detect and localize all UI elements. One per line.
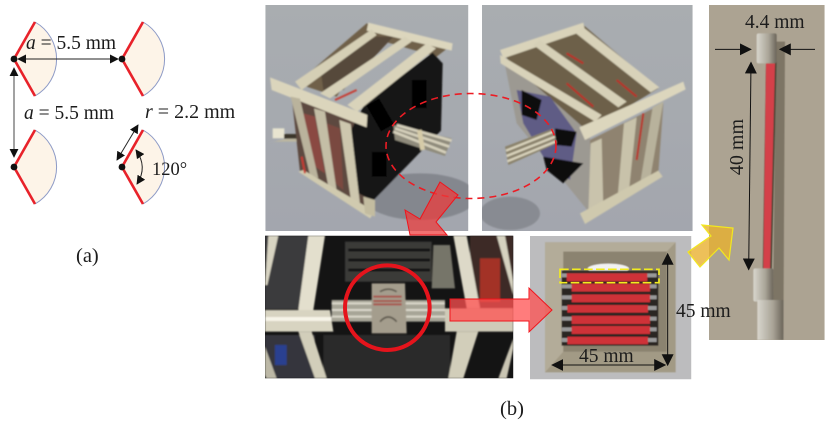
length dimension arrow xyxy=(749,63,751,269)
label vertical spacing: a = 5.5 mm xyxy=(24,103,114,124)
callout circle xyxy=(345,265,430,350)
label angle: 120° xyxy=(152,160,187,180)
photo: assembly right view xyxy=(480,5,693,231)
sector top left xyxy=(11,22,57,96)
label horizontal spacing: a = 5.5 mm xyxy=(26,33,116,54)
sector bottom right xyxy=(119,130,165,204)
caption a: (a) xyxy=(76,245,99,267)
arrow right of diameter xyxy=(780,48,815,51)
label width 45 mm: 45 mm xyxy=(579,346,634,367)
horizontal spacing arrow xyxy=(18,58,118,60)
yellow arrow up-right xyxy=(688,225,733,267)
label radius: r = 2.2 mm xyxy=(145,101,236,123)
photo: single electrode rod xyxy=(709,5,825,340)
label height 45 mm: 45 mm xyxy=(676,301,731,322)
photo: assembly left view xyxy=(265,5,477,231)
label diameter: 4.4 mm xyxy=(745,12,805,33)
photo: electrode array xyxy=(530,236,691,379)
angle arc arrow xyxy=(136,150,142,184)
dashed ellipse callout xyxy=(386,94,556,198)
red arrow down-left xyxy=(405,182,458,235)
arrow left of diameter xyxy=(715,48,751,51)
label length: 40 mm xyxy=(726,119,748,175)
photo: assembly close-up xyxy=(265,236,513,378)
height dimension arrow xyxy=(666,254,669,365)
radius arrow xyxy=(117,125,138,160)
width dimension arrow xyxy=(552,363,665,366)
yellow highlight box xyxy=(560,269,659,283)
panel b: photographs xyxy=(265,5,825,420)
sector top right xyxy=(119,22,165,96)
vertical spacing arrow xyxy=(13,68,15,157)
sector bottom left xyxy=(11,130,57,204)
red arrow right xyxy=(450,288,552,332)
caption b: (b) xyxy=(500,398,524,420)
panel a: sector array schematic xyxy=(11,22,236,267)
